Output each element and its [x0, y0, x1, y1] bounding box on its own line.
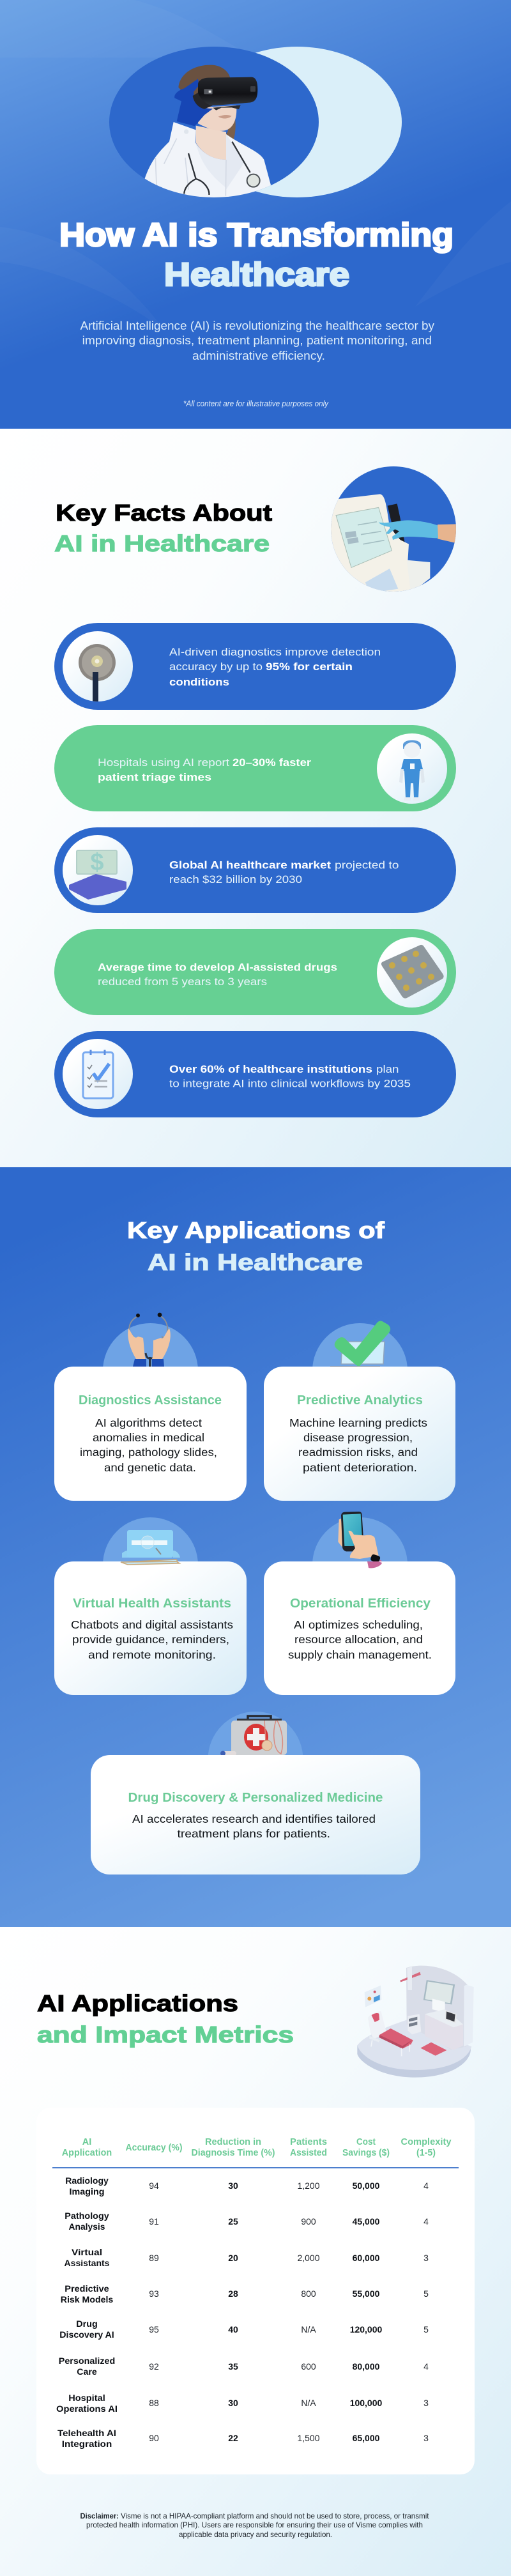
hero note: *All content are for illustrative purposes only: [183, 399, 329, 408]
disclaimer: applicable data privacy and security regulation.: [179, 2530, 332, 2539]
fact text 1: conditions: [169, 676, 229, 688]
left blue ellipse: [109, 47, 319, 197]
row: radiology imaging: 4: [423, 2181, 429, 2191]
card: operational efficiency: [264, 1512, 455, 1695]
fact text 5: [169, 1063, 411, 1090]
hero intro paragraph: [80, 319, 434, 362]
section: key facts: [0, 429, 511, 1167]
table header: Reduction in: [205, 2137, 261, 2147]
fact text 2: 20–30% faster: [233, 756, 311, 769]
row: drug discovery: Discovery AI: [59, 2329, 114, 2340]
card text: [289, 1416, 427, 1474]
row: predictive risk models: [61, 2283, 429, 2304]
row: telehealth integration: 1,500: [297, 2433, 320, 2443]
row: hospital operations: Hospital: [68, 2393, 105, 2403]
hero intro paragraph: administrative efficiency.: [192, 349, 325, 362]
fact text 4: [98, 961, 337, 988]
row: hospital operations: N/A: [301, 2398, 316, 2408]
table header: Savings ($): [342, 2148, 390, 2158]
row: telehealth integration: 22: [228, 2433, 238, 2443]
row: hospital operations: 88: [149, 2398, 159, 2408]
fact text 2: [98, 756, 311, 783]
card: predictive analytics: [264, 1321, 455, 1501]
card text: provide guidance, reminders,: [72, 1633, 229, 1646]
fact text 4: reduced from 5 years to 3 years: [98, 976, 267, 988]
row: radiology imaging: 50,000: [353, 2181, 380, 2191]
table header: Patients: [290, 2137, 327, 2147]
row: personalized care: 4: [423, 2361, 429, 2372]
photo: gloved hand touching kiosk screen: [326, 466, 456, 599]
card text: supply chain management.: [288, 1648, 432, 1661]
fact pill 3: [54, 827, 456, 913]
section: key applications: [0, 1167, 511, 1927]
row: hospital operations: 3: [423, 2398, 429, 2408]
icon: hands holding stethoscope: [128, 1313, 171, 1367]
row: drug discovery: [59, 2319, 429, 2340]
row: virtual assistants: Virtual: [72, 2247, 102, 2257]
fact text 5: to integrate AI into clinical workflows by 2035: [169, 1077, 411, 1090]
row: predictive risk models: 93: [149, 2288, 159, 2299]
hero intro paragraph: Artificial Intelligence (AI) is revolutionizing the healthcare sector by: [80, 319, 434, 332]
fact text 1: accuracy by up to: [169, 661, 263, 673]
card text: disease progression,: [303, 1431, 413, 1444]
row: radiology imaging: [65, 2175, 429, 2196]
card text: anomalies in medical: [93, 1431, 204, 1444]
row: pathology analysis: 45,000: [353, 2216, 380, 2227]
row: drug discovery: Drug: [76, 2319, 98, 2329]
row: radiology imaging: Radiology: [65, 2175, 109, 2186]
card: virtual health assistants: [54, 1517, 247, 1695]
card: diagnostics assistance: Diagnostics Assistance: [79, 1393, 222, 1407]
icon: green check over laptop: [330, 1321, 390, 1367]
icon: dollar on a platform: $: [90, 849, 104, 876]
fact text 3: projected to: [335, 859, 399, 871]
row: hospital operations: 30: [228, 2398, 238, 2408]
card text: resource allocation, and: [294, 1633, 423, 1646]
right pale ellipse: [192, 47, 402, 197]
card text: AI optimizes scheduling,: [294, 1618, 423, 1631]
fact text 2: Hospitals using AI report: [98, 756, 229, 769]
row: virtual assistants: 89: [149, 2253, 159, 2263]
card text: and remote monitoring.: [88, 1648, 216, 1661]
table header: Complexity: [401, 2137, 451, 2147]
row: predictive risk models: 800: [301, 2288, 316, 2299]
row: radiology imaging: 94: [149, 2181, 159, 2191]
card text: AI algorithms detect: [95, 1416, 202, 1429]
disclaimer: Disclaimer:: [80, 2511, 119, 2520]
row: radiology imaging: 1,200: [297, 2181, 320, 2191]
row: telehealth integration: [57, 2428, 429, 2449]
card: operational efficiency: Operational Efficiency: [290, 1597, 431, 1611]
fact text 1: AI-driven diagnostics improve detection: [169, 646, 381, 658]
key facts heading: AI in Healthcare: [54, 530, 270, 556]
row: virtual assistants: Assistants: [64, 2258, 110, 2268]
row: virtual assistants: 20: [228, 2253, 238, 2263]
row: pathology analysis: Pathology: [65, 2211, 109, 2221]
card: predictive analytics: Predictive Analytics: [297, 1393, 423, 1407]
row: virtual assistants: 2,000: [297, 2253, 320, 2263]
row: virtual assistants: [64, 2247, 429, 2268]
card text: imaging, pathology slides,: [80, 1446, 217, 1459]
table header: [62, 2137, 451, 2158]
row: personalized care: 80,000: [353, 2361, 380, 2372]
row: virtual assistants: 3: [423, 2253, 429, 2263]
key applications heading: AI in Healthcare: [148, 1249, 363, 1275]
key facts heading: Key Facts About: [56, 500, 272, 526]
row: personalized care: Care: [77, 2366, 97, 2377]
hero intro paragraph: improving diagnosis, treatment planning, patient monitoring, and: [82, 334, 432, 347]
impact metrics heading: [37, 1990, 294, 2048]
disclaimer: protected health information (PHI). Users are responsible for ensuring their use of Visme complies with: [86, 2520, 423, 2529]
row: predictive risk models: 55,000: [353, 2288, 380, 2299]
row: personalized care: [59, 2356, 429, 2377]
photo: doctor wearing VR headset: [145, 65, 271, 211]
card text: [132, 1813, 376, 1840]
row: pathology analysis: [65, 2211, 429, 2232]
key applications heading: [127, 1217, 385, 1275]
hero title: Healthcare: [164, 256, 349, 293]
row: telehealth integration: 65,000: [353, 2433, 380, 2443]
fact text 5: Over 60% of healthcare institutions: [169, 1063, 372, 1075]
row: pathology analysis: 900: [301, 2216, 316, 2227]
row: pathology analysis: Analysis: [69, 2221, 105, 2232]
row: hospital operations: Operations AI: [56, 2404, 118, 2414]
fact text 5: plan: [376, 1063, 399, 1075]
row: pathology analysis: 25: [228, 2216, 238, 2227]
table header: Accuracy (%): [125, 2143, 183, 2153]
table header: Assisted: [290, 2148, 327, 2158]
card text: patient deterioration.: [303, 1461, 417, 1474]
fact text 4: Average time to develop AI-assisted drugs: [98, 961, 337, 974]
fact pill 5: [54, 1031, 456, 1117]
table header: Cost: [356, 2137, 376, 2147]
impact metrics heading: and Impact Metrics: [37, 2021, 294, 2048]
card: virtual health assistants: Virtual Health Assistants: [73, 1597, 231, 1611]
row: pathology analysis: 91: [149, 2216, 159, 2227]
icon: hand tapping smartphone: [338, 1512, 382, 1568]
row: virtual assistants: 60,000: [353, 2253, 380, 2263]
row: hospital operations: 100,000: [350, 2398, 383, 2408]
fact text 2: patient triage times: [98, 771, 211, 783]
row: pathology analysis: 4: [423, 2216, 429, 2227]
hero title: [59, 217, 454, 293]
card text: AI accelerates research and identifies tailored: [132, 1813, 376, 1825]
row: radiology imaging: 30: [228, 2181, 238, 2191]
section: impact metrics: [0, 1927, 511, 2576]
row: personalized care: 92: [149, 2361, 159, 2372]
disclaimer: [80, 2511, 429, 2539]
row: personalized care: Personalized: [59, 2356, 115, 2366]
row: predictive risk models: Predictive: [65, 2283, 109, 2294]
card text: readmission risks, and: [298, 1446, 418, 1459]
card text: [71, 1618, 233, 1661]
row: telehealth integration: Telehealth AI: [57, 2428, 116, 2438]
row: drug discovery: 120,000: [350, 2324, 383, 2334]
fact pill 2: [54, 725, 456, 811]
card: diagnostics assistance: [54, 1313, 247, 1501]
row: telehealth integration: 3: [423, 2433, 429, 2443]
table header: (1-5): [416, 2148, 436, 2158]
card text: Chatbots and digital assistants: [71, 1618, 233, 1631]
row: drug discovery: 40: [228, 2324, 238, 2334]
fact text 3: reach $32 billion by 2030: [169, 873, 302, 885]
table card: [36, 2108, 475, 2474]
fact text 1: [169, 646, 381, 688]
row: hospital operations: [56, 2393, 429, 2414]
row: telehealth integration: 90: [149, 2433, 159, 2443]
row: drug discovery: 5: [423, 2324, 429, 2334]
card text: and genetic data.: [104, 1461, 196, 1474]
icon: nurse figure: [377, 733, 447, 804]
impact metrics heading: AI Applications: [37, 1990, 238, 2016]
row: drug discovery: N/A: [301, 2324, 316, 2334]
table header: Diagnosis Time (%): [192, 2148, 275, 2158]
row: personalized care: 600: [301, 2361, 316, 2372]
key applications heading: Key Applications of: [127, 1217, 385, 1243]
card text: treatment plans for patients.: [178, 1827, 330, 1840]
table header: Application: [62, 2148, 112, 2158]
fact pill 1: [54, 623, 456, 710]
key facts heading: [54, 500, 272, 556]
row: personalized care: 35: [228, 2361, 238, 2372]
card text: [288, 1618, 432, 1661]
fact text 3: [169, 859, 399, 885]
section: hero: [0, 0, 511, 429]
icon: stethoscope chest piece: [63, 631, 133, 704]
icon: dollar on a platform: [63, 835, 133, 905]
row: predictive risk models: 5: [423, 2288, 429, 2299]
row: telehealth integration: Integration: [62, 2439, 112, 2449]
table header: AI: [82, 2137, 91, 2147]
icon: blister pack: [377, 937, 447, 1008]
illustration: isometric hospital room: [357, 1966, 474, 2078]
card text: Machine learning predicts: [289, 1416, 427, 1429]
disclaimer: Visme is not a HIPAA-compliant platform and should not be used to store, process, or transmit: [121, 2511, 429, 2520]
icon: tablet with search window: [121, 1530, 180, 1565]
row: radiology imaging: Imaging: [69, 2186, 105, 2196]
row: predictive risk models: 28: [228, 2288, 238, 2299]
card text: [80, 1416, 217, 1474]
fact text 1: 95% for certain: [266, 661, 353, 673]
card: drug discovery and personalized medicine: [91, 1712, 420, 1874]
fact pill 4: [54, 929, 456, 1015]
row: predictive risk models: Risk Models: [61, 2294, 113, 2304]
fact text 3: Global AI healthcare market: [169, 859, 331, 871]
icon: clipboard checklist: [63, 1039, 133, 1109]
hero title: How AI is Transforming: [59, 217, 454, 253]
row: drug discovery: 95: [149, 2324, 159, 2334]
card: drug discovery and personalized medicine: Drug Discovery & Personalized Medicine: [128, 1791, 383, 1805]
icon: first aid kit: [220, 1716, 287, 1756]
